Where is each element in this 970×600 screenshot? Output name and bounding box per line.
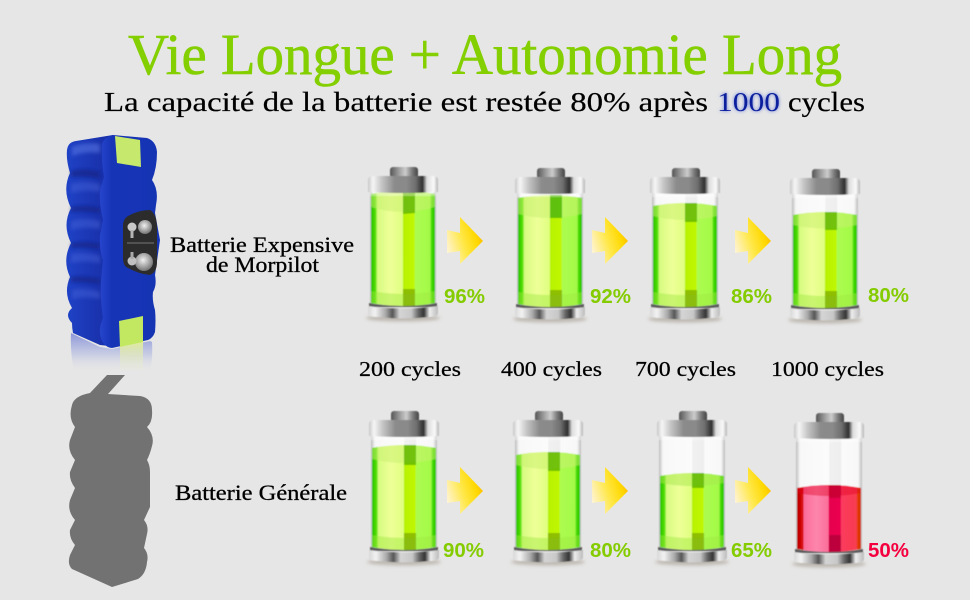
value 80% top: 80%: [868, 285, 909, 307]
connector: [123, 210, 157, 275]
arrow 2 top: [592, 217, 628, 264]
label: Batterie Expensive de Morpilot: [170, 232, 354, 277]
arrow 1 top: [447, 217, 483, 264]
value 50%: 50%: [868, 540, 909, 562]
cycle labels: 700 cycles: [635, 357, 736, 381]
battery: 80%: [788, 169, 862, 324]
value 90%: 90%: [443, 540, 484, 562]
bottom green label: [119, 316, 143, 347]
battery: 80% generic: [511, 411, 585, 566]
title: Vie Longue + Autonomie Long: [128, 22, 842, 87]
arrow 2 bottom: [592, 467, 628, 514]
subtitle: 1000: [717, 87, 780, 117]
label: Batterie Expensive de Morpilot: Batterie Expensive: [170, 232, 354, 257]
battery side panel: [66, 135, 120, 346]
cycle labels: 1000 cycles: [771, 357, 884, 381]
cycle labels: 400 cycles: [501, 357, 602, 381]
value 86%: 86%: [731, 286, 772, 308]
battery front face: [100, 135, 160, 348]
value 92%: 92%: [590, 286, 631, 308]
icon: generic grey battery silhouette: [69, 375, 153, 587]
subtitle: cycles: [788, 87, 865, 117]
label: Batterie Générale: Batterie Générale: [175, 480, 347, 505]
subtitle: [104, 87, 865, 117]
arrow 3 top: [735, 217, 771, 264]
arrow 3 bottom: [735, 467, 771, 514]
top green label: [115, 136, 141, 167]
icon: blue Morpilot battery: [66, 135, 160, 373]
subtitle: 1000: [717, 87, 780, 117]
battery: 92%: [513, 168, 587, 322]
battery: 65%: [655, 411, 729, 566]
value 65%: 65%: [731, 540, 772, 562]
value 80% bottom: 80%: [590, 540, 631, 562]
subtitle: La capacité de la batterie est restée 80% après: [104, 87, 708, 117]
cycle labels: 200 cycles: [359, 357, 461, 381]
battery: 50% red: [792, 413, 866, 568]
label: Batterie Expensive de Morpilot: de Morpilot: [206, 252, 319, 277]
battery: 86%: [648, 168, 722, 322]
cycle labels: [359, 357, 884, 381]
side shading bands: [71, 143, 100, 299]
reflection: [71, 333, 152, 373]
value 96%: 96%: [444, 286, 485, 308]
battery: 96%: [366, 167, 440, 322]
arrow 1 bottom: [447, 467, 483, 514]
battery: 90%: [367, 411, 441, 566]
